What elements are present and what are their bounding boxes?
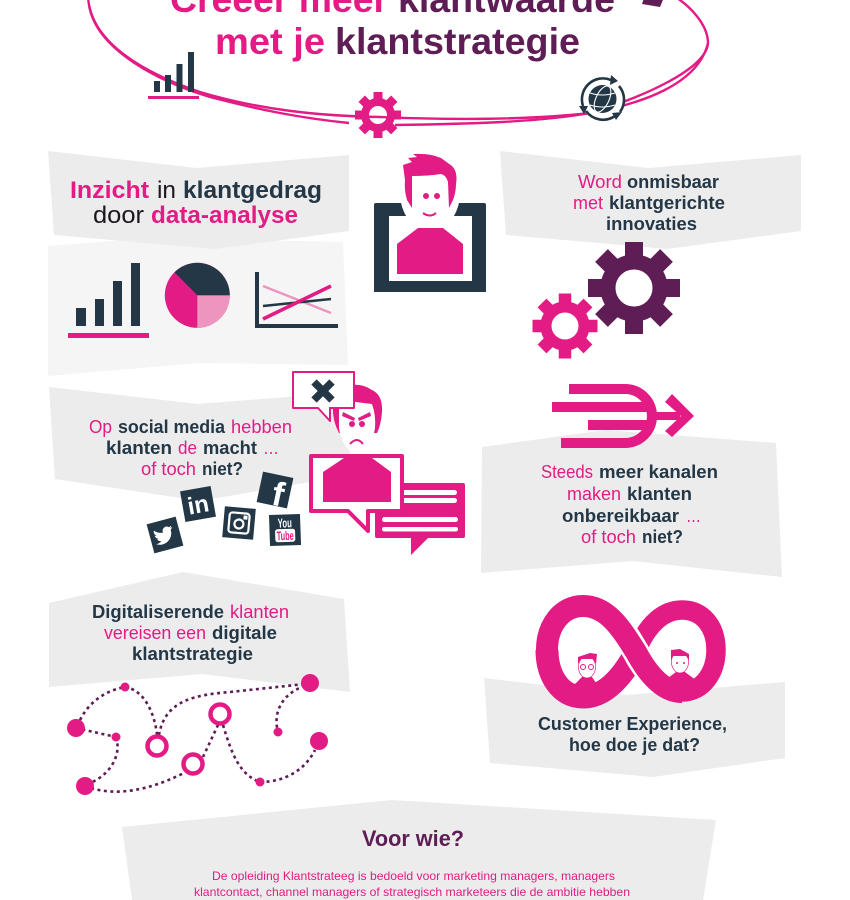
- heading: …: [686, 505, 701, 526]
- heading: [89, 416, 292, 479]
- icon: linkedin: [180, 486, 216, 522]
- panel background: heading: [48, 151, 349, 249]
- panel background: [481, 430, 782, 577]
- heading: innovaties: [606, 214, 697, 234]
- crossing gap: [620, 627, 650, 673]
- icon: youtube: You: [277, 515, 292, 531]
- heading: Word: [578, 172, 622, 192]
- heading: onmisbaar: [627, 172, 719, 192]
- icon: youtube: Tube: [276, 529, 294, 543]
- body text: [194, 869, 630, 899]
- heading: …: [263, 437, 279, 458]
- icon: portrait in frame: [374, 154, 486, 292]
- heading: met: [573, 193, 603, 213]
- icon: small gear: [355, 92, 401, 138]
- panel: social media: [49, 372, 465, 555]
- heading: klanten: [106, 437, 172, 458]
- angry head: [333, 385, 382, 455]
- heading: klanten: [230, 602, 289, 622]
- heading: Voor wie?: [362, 826, 464, 851]
- heading: of toch: [141, 458, 196, 479]
- icon: youtube: [269, 514, 301, 546]
- icon: instagram: [222, 506, 256, 540]
- heading: [538, 713, 727, 755]
- customer with glasses: [573, 653, 598, 686]
- heading: onbereikbaar: [562, 505, 679, 526]
- body text: klantcontact, channel managers of strategisch marketeers die de ambitie hebben: [194, 885, 630, 899]
- heading: in: [157, 177, 176, 204]
- panel: meer kanalen: [481, 389, 782, 577]
- title: [170, 0, 615, 62]
- heading: meer kanalen: [599, 461, 718, 482]
- heading: digitale: [212, 623, 277, 643]
- heading: Digitaliserende: [92, 602, 224, 622]
- heading: data-analyse: [151, 202, 298, 229]
- heading: Steeds: [541, 461, 593, 482]
- panel background: [122, 800, 716, 900]
- filled speech bubble: [375, 483, 465, 555]
- heading: maken: [567, 483, 621, 504]
- heading: hoe doe je dat?: [569, 734, 700, 755]
- heading: klantstrategie: [132, 644, 253, 664]
- title: met je: [215, 21, 325, 62]
- icon: facebook: f: [269, 475, 288, 515]
- customer without glasses: [664, 649, 697, 688]
- heading: [70, 177, 322, 229]
- icon: facebook: [255, 472, 293, 516]
- icon: globe with arrows: [579, 75, 625, 121]
- panel: inzicht in klantgedrag: [48, 151, 349, 376]
- body text: De opleiding Klantstrateeg is bedoeld voor marketing managers, managers: [212, 869, 615, 883]
- panel background: charts: [48, 238, 348, 376]
- heading: de: [178, 437, 197, 458]
- heading: door: [93, 202, 144, 229]
- icon: linkedin: in: [185, 490, 211, 521]
- heading: macht: [203, 437, 257, 458]
- heading: niet?: [202, 458, 243, 479]
- heading: [92, 602, 289, 664]
- heading: klanten: [627, 483, 692, 504]
- panel: digitale klantstrategie: [49, 572, 350, 795]
- header section: [88, 0, 708, 138]
- heading: Inzicht: [70, 177, 149, 204]
- icon: purple fragment: [642, 0, 665, 7]
- infinity main strand: [547, 606, 682, 692]
- small X speech bubble: [293, 372, 354, 421]
- heading: of toch: [581, 526, 636, 547]
- heading: hebben: [231, 416, 292, 437]
- icon: infinity with two customers: [547, 606, 716, 697]
- heading: [541, 461, 718, 547]
- icon: large gear: [588, 242, 680, 334]
- heading: niet?: [642, 526, 683, 547]
- title: klantstrategie: [335, 21, 580, 62]
- heading: Customer Experience,: [538, 713, 727, 734]
- panel: customer experience: [484, 606, 785, 777]
- pie chart: [165, 263, 230, 328]
- panel: voor wie: [122, 800, 716, 900]
- icon: small bar chart: [148, 52, 199, 99]
- heading: klantgerichte: [609, 193, 725, 213]
- infinity under-strand right: [636, 610, 716, 692]
- icon: angry customer with speech bubbles: [293, 372, 465, 555]
- heading: social media: [118, 416, 226, 437]
- swirl ellipse lines: [88, 0, 708, 125]
- outlined bubble with bust: [311, 456, 402, 533]
- icon: channels merging into arrow: [552, 389, 694, 443]
- line chart: [257, 272, 338, 326]
- heading: klantgedrag: [183, 177, 322, 204]
- panel background: [49, 572, 350, 692]
- panel background: [500, 151, 801, 249]
- icon: small gear: [532, 294, 598, 358]
- icon: twitter: [147, 517, 183, 553]
- bar chart: [68, 263, 149, 338]
- panel background: [49, 387, 350, 501]
- heading: Op: [89, 416, 112, 437]
- panel: klantgerichte innovaties: [500, 151, 801, 358]
- panel background: [484, 678, 785, 777]
- heading: vereisen een: [104, 623, 206, 643]
- heading: [573, 172, 725, 234]
- network of dotted paths: [67, 674, 328, 795]
- infinity under-strand left: [547, 650, 636, 697]
